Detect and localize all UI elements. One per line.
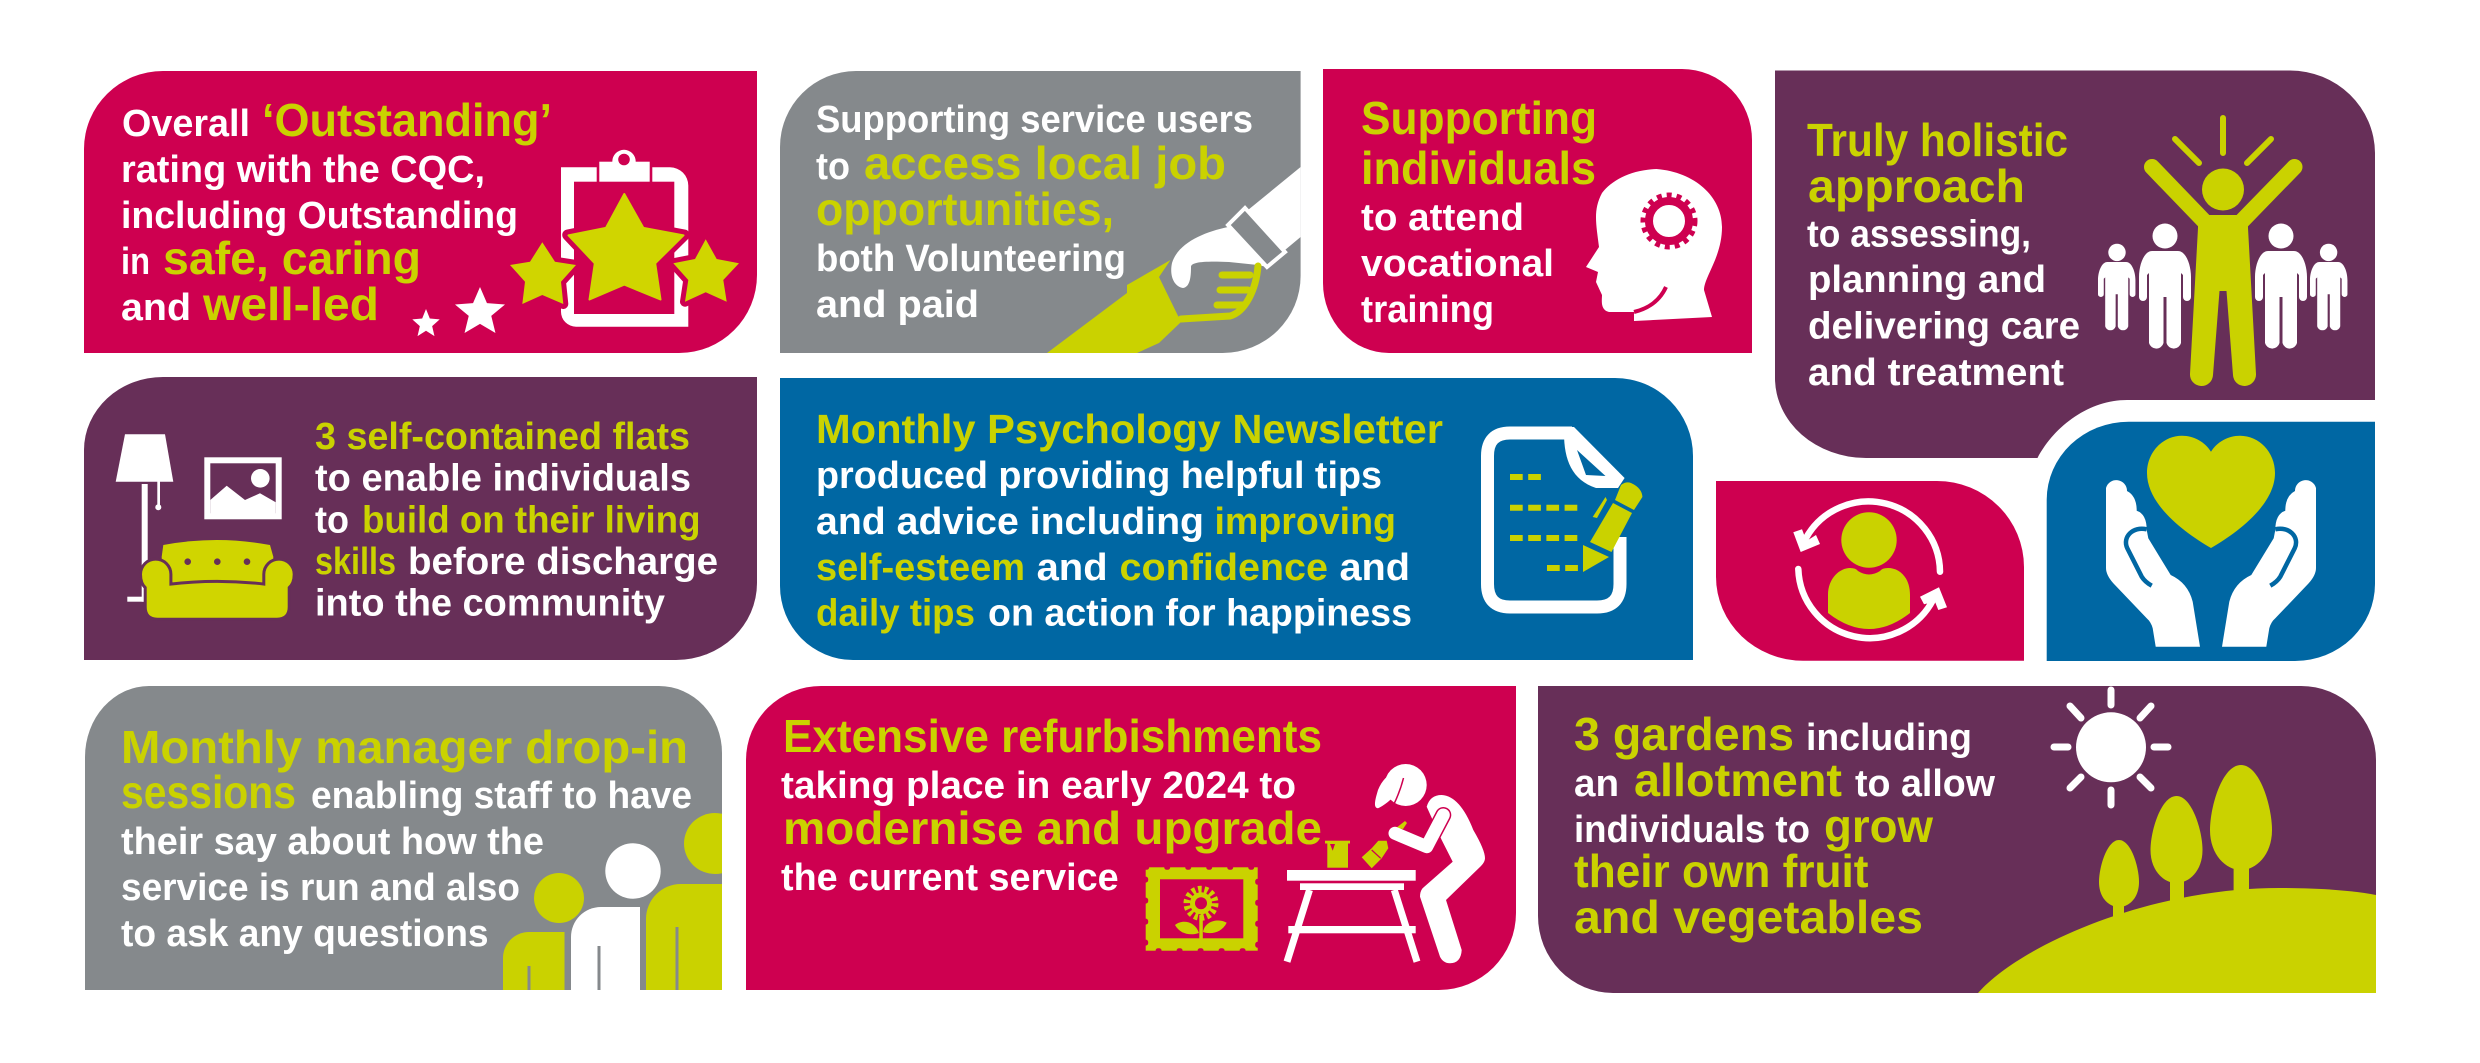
icon: three people bbox=[503, 813, 746, 990]
text: self-contained flats bbox=[315, 416, 718, 625]
panel background bbox=[1716, 481, 2024, 661]
text: self-contained flats: 3 self-contained flats bbox=[315, 416, 690, 458]
panel background bbox=[746, 686, 1516, 990]
icon: person painting at table bbox=[1287, 764, 1485, 963]
text: job opportunities: to bbox=[816, 146, 850, 188]
text: gardens: and vegetables bbox=[1574, 891, 1923, 943]
panel: holistic approach bbox=[1775, 70, 2375, 458]
text: vocational training bbox=[1361, 92, 1597, 331]
text: manager drop-in: to ask any questions bbox=[121, 913, 489, 955]
icon: sun bbox=[2054, 690, 2168, 805]
panel background bbox=[84, 71, 757, 353]
text: gardens: their own fruit bbox=[1574, 845, 1868, 897]
text: vocational training: vocational bbox=[1361, 243, 1554, 285]
text: psychology newsletter: improving bbox=[1214, 501, 1396, 543]
text: self-contained flats: into the community bbox=[315, 583, 665, 625]
text: self-contained flats: to enable individuals bbox=[315, 458, 691, 500]
text: outstanding rating: rating with the CQC, bbox=[121, 149, 485, 191]
text: outstanding rating bbox=[121, 94, 552, 330]
panel background bbox=[1323, 69, 1752, 353]
panel: caring hands bbox=[2047, 422, 2375, 661]
text: job opportunities bbox=[816, 99, 1253, 326]
text: holistic approach: to assessing, bbox=[1807, 214, 2031, 256]
panel background bbox=[780, 378, 1693, 660]
text: gardens: 3 gardens bbox=[1574, 708, 1794, 760]
text: self-contained flats: before discharge bbox=[408, 541, 718, 583]
text: vocational training: Supporting bbox=[1361, 92, 1597, 144]
text: holistic approach: delivering care bbox=[1808, 306, 2080, 348]
text: gardens bbox=[1574, 708, 1995, 943]
text: outstanding rating: including Outstanding bbox=[121, 195, 518, 237]
icon: document and pencil bbox=[1488, 427, 1642, 607]
text: gardens: including bbox=[1806, 717, 1972, 759]
text: refurbishments: taking place in early 2024 to bbox=[781, 765, 1296, 807]
text: holistic approach bbox=[1807, 114, 2080, 394]
text: outstanding rating: in bbox=[121, 241, 150, 283]
text: refurbishments: modernise and upgrade bbox=[783, 802, 1322, 854]
text: outstanding rating: safe, caring bbox=[163, 232, 421, 284]
text: self-contained flats: to bbox=[315, 499, 349, 541]
panel: refurbishments bbox=[746, 686, 1516, 990]
text: refurbishments: the current service bbox=[781, 857, 1119, 899]
text: manager drop-in: their say about how the bbox=[121, 821, 544, 863]
icon: handshake grip bbox=[1047, 167, 1301, 353]
text: psychology newsletter: and advice including bbox=[816, 501, 1204, 543]
text: job opportunities: Supporting service users bbox=[816, 99, 1253, 141]
text: vocational training: training bbox=[1361, 289, 1494, 331]
text: psychology newsletter: self-esteem bbox=[816, 547, 1025, 589]
icon: person with cycle arrows bbox=[1793, 501, 1947, 638]
icon: clipboard with stars bbox=[412, 150, 739, 336]
text: gardens: to allow bbox=[1855, 763, 1995, 805]
text: psychology newsletter: confidence bbox=[1120, 547, 1328, 589]
text: holistic approach: planning and bbox=[1808, 259, 2046, 301]
icon: hands holding heart bbox=[2106, 436, 2316, 647]
text: psychology newsletter bbox=[816, 406, 1443, 635]
text: psychology newsletter: and bbox=[1340, 547, 1410, 589]
icon: group of people with raised figure bbox=[2098, 118, 2347, 386]
panel: outstanding rating bbox=[84, 71, 757, 353]
text: gardens: allotment bbox=[1634, 754, 1842, 806]
text: psychology newsletter: on action for happiness bbox=[988, 593, 1412, 635]
text: gardens: grow bbox=[1824, 800, 1933, 852]
panel: vocational training bbox=[1323, 69, 1752, 353]
text: manager drop-in bbox=[121, 721, 692, 955]
panel background bbox=[1775, 70, 2375, 458]
panel: person with circular arrows bbox=[1716, 481, 2024, 661]
text: job opportunities: opportunities, bbox=[816, 183, 1114, 235]
text: outstanding rating: well-led bbox=[202, 278, 379, 330]
panel: psychology newsletter bbox=[780, 378, 1693, 660]
text: gardens: an bbox=[1574, 763, 1619, 805]
panel: gardens bbox=[1538, 686, 2376, 993]
text: manager drop-in: sessions bbox=[121, 766, 296, 818]
text: job opportunities: access local job bbox=[864, 137, 1226, 189]
panel: manager drop-in sessions bbox=[85, 686, 746, 990]
text: psychology newsletter: daily tips bbox=[816, 593, 975, 635]
icon: living room bbox=[116, 434, 293, 618]
text: gardens: individuals to bbox=[1574, 809, 1810, 851]
panel background bbox=[84, 377, 757, 660]
text: refurbishments bbox=[781, 710, 1322, 899]
text: psychology newsletter: Monthly Psychology Newsletter bbox=[816, 406, 1443, 452]
text: outstanding rating: and bbox=[121, 287, 191, 329]
panel background bbox=[1538, 686, 2376, 993]
text: job opportunities: both Volunteering bbox=[816, 238, 1126, 280]
text: vocational training: individuals bbox=[1361, 142, 1596, 194]
text: job opportunities: and paid bbox=[816, 284, 979, 326]
icon: hill with trees bbox=[1978, 765, 2376, 993]
text: outstanding rating: ‘Outstanding’ bbox=[262, 94, 552, 146]
panel background bbox=[2047, 422, 2375, 661]
text: self-contained flats: build on their living bbox=[362, 499, 700, 541]
panel: local job opportunities bbox=[780, 71, 1301, 353]
text: vocational training: to attend bbox=[1361, 197, 1524, 239]
panel background bbox=[85, 686, 722, 990]
text: manager drop-in: Monthly manager drop-in bbox=[121, 721, 688, 773]
text: holistic approach: approach bbox=[1808, 160, 2025, 212]
text: holistic approach: and treatment bbox=[1808, 352, 2064, 394]
text: holistic approach: Truly holistic bbox=[1807, 114, 2068, 166]
icon: head with gear bbox=[1586, 169, 1722, 321]
icon: framed flower bbox=[1146, 867, 1258, 951]
panel background bbox=[780, 71, 1301, 353]
text: self-contained flats: skills bbox=[315, 541, 396, 583]
text: manager drop-in: service is run and also bbox=[121, 867, 520, 909]
text: refurbishments: Extensive refurbishments bbox=[783, 710, 1322, 762]
text: psychology newsletter: produced providing helpful tips bbox=[816, 455, 1382, 497]
text: manager drop-in: enabling staff to have bbox=[311, 775, 692, 817]
panel: self-contained flats bbox=[84, 377, 757, 660]
text: psychology newsletter: and bbox=[1037, 547, 1108, 589]
text: outstanding rating: Overall bbox=[122, 103, 250, 145]
